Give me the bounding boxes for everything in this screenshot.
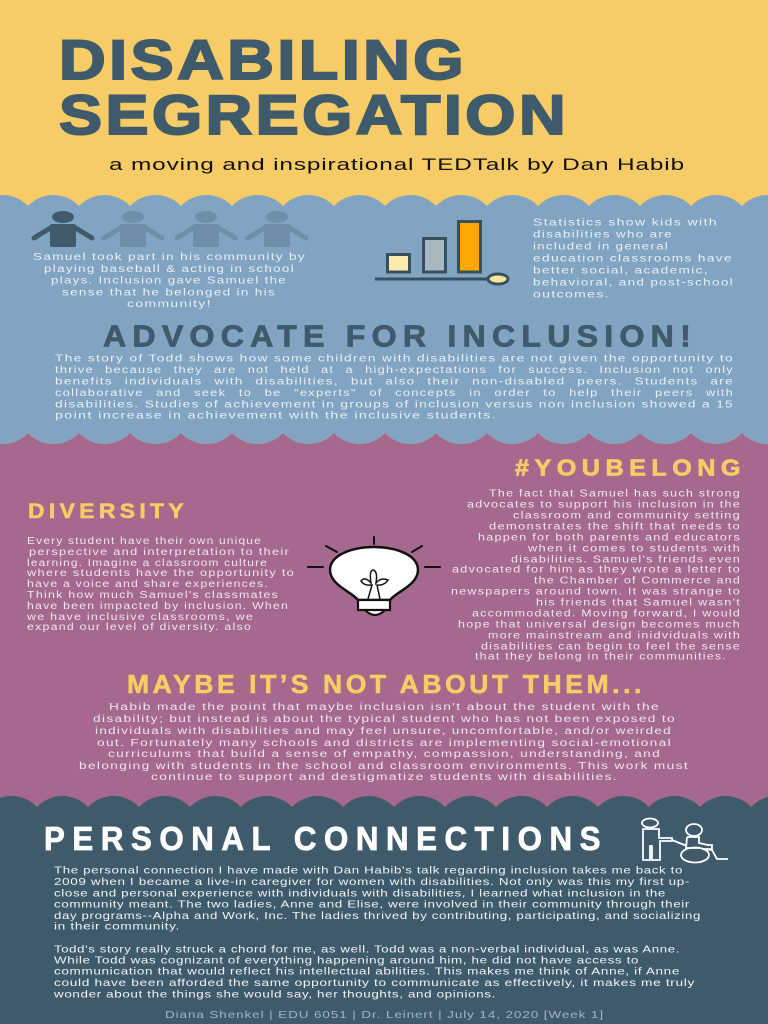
text block: Habib point: continue to support and destigmatize students with disabilities. — [151, 772, 618, 783]
text block: diversity: learning. Imagine a classroom culture — [27, 558, 268, 569]
title: SEGREGATION — [59, 83, 569, 146]
icon: caregiver with wheelchair user — [642, 818, 728, 862]
text block: Samuel community: plays. Inclusion gave Samuel the — [51, 276, 287, 286]
text block: personal connection paragraph 1 — [54, 864, 701, 932]
text block: youbelong: the Chamber of Commerce and — [534, 576, 741, 586]
panel: yellow title header — [0, 0, 768, 215]
text block: story of Todd: The story of Todd shows how some children with disabilities are not given the opportunity to — [55, 354, 734, 364]
text block: diversity: perspective and interpretation to their — [29, 547, 290, 558]
text block: diversity: where students have the opportunity to — [26, 568, 295, 579]
heading: youbelong: #YOUBELONG — [515, 454, 746, 480]
text block: personal connection paragraph 1: in their community. — [54, 920, 180, 932]
text block: youbelong: advocated for him as they wrote a letter to — [452, 564, 741, 576]
text block: personal connection paragraph 2: Todd's story really struck a chord for me, as well. Todd was a non-verbal individual, as was Anne. — [54, 944, 680, 956]
text block: youbelong: when it comes to students with — [527, 544, 741, 554]
text block: youbelong: classroom and community setting — [513, 510, 741, 522]
text block: youbelong: The fact that Samuel has such strong — [489, 488, 741, 500]
text block: youbelong: more mainstream and inidviduals with — [488, 630, 741, 642]
title: DISABILING — [59, 28, 467, 91]
text block: youbelong: disabilities. Samuel's friends even — [511, 554, 741, 566]
text block: youbelong: accommodated. Moving forward, I would — [472, 608, 741, 620]
text block: Habib point: out. Fortunately many schools and districts are implementing social-emotional — [97, 738, 672, 749]
text block: statistics: behavioral, and post-school — [533, 278, 734, 288]
text block: story of Todd: collaborative and seek to be "experts" of concepts in order to help their peers with — [55, 388, 734, 399]
text block: personal connection paragraph 1: close and personal experience with individuals with disabilities, I learned what inclusion in the — [54, 888, 666, 900]
text block: Habib point: individuals with disabilities and may feel unsure, uncomfortable, and/or weirded — [95, 726, 672, 737]
text block: youbelong: disabilities can begin to feel the sense — [481, 642, 741, 652]
text block: diversity: have been impacted by inclusion. When — [27, 601, 289, 612]
text block: statistics — [533, 218, 734, 300]
text block: story of Todd: disabilities. Studies of achievement in groups of inclusion versus non inclusion showed a 15 — [55, 400, 734, 410]
heading: diversity: DIVERSITY — [28, 500, 188, 523]
text block: statistics: outcomes. — [533, 290, 610, 300]
text block: story of Todd: benefits individuals with disabilities, but also their non-disabled peers. Students are — [55, 376, 734, 388]
text block: diversity: Every student have their own unique — [27, 536, 262, 547]
text block: Samuel community: community! — [127, 299, 212, 310]
panel: blue advocate for inclusion — [0, 195, 768, 444]
text block: Habib point: belonging with students in the school and classroom environments. This work must — [79, 761, 689, 772]
text block: story of Todd — [55, 354, 734, 422]
text block: Habib point: disability; but instead is about the typical student who has not been exposed to — [93, 714, 676, 725]
panel: dark personal connections background — [0, 796, 768, 1024]
text block: personal connection paragraph 1: The personal connection I have made with Dan Habib's talk regarding inclusion takes me back to — [54, 864, 683, 876]
footer: Diana Shenkel | EDU 6051 | Dr. Leinert | July 14, 2020 [Week 1] — [165, 1009, 604, 1021]
subtitle: a moving and inspirational TEDTalk by Dan Habib — [109, 155, 685, 174]
text block: diversity: we have inclusive classrooms, we — [26, 612, 254, 623]
text block: story of Todd: point increase in achievement with the inclusive students. — [55, 410, 497, 422]
text block: Habib point: Habib made the point that maybe inclusion isn't about the student with the — [109, 702, 660, 713]
text block: story of Todd: thrive because they are not held at a high-expectations for success. Inclusion not only — [55, 365, 734, 376]
icon: light bulb — [308, 537, 440, 615]
text block: youbelong: happen for both parents and educators — [478, 532, 741, 544]
text block: Habib point: curriculums that build a sense of empathy, compassion, understanding, and — [108, 749, 661, 760]
icon: bar chart — [375, 222, 508, 284]
text block: Samuel community: playing baseball & acting in school — [44, 264, 295, 275]
text block: diversity: Think how much Samuel's classmates — [27, 590, 279, 601]
text block: personal connection paragraph 2: communication that would reflect his intellectual abilities. This makes me think of Anne, if Anne — [54, 966, 680, 978]
text block: Samuel community: Samuel took part in his community by — [33, 252, 306, 263]
text block: youbelong — [451, 488, 741, 662]
text block: personal connection paragraph 2: While Todd was cognizant of everything happening around him, he did not have access to — [54, 954, 639, 966]
text block: personal connection paragraph 2 — [53, 944, 695, 1000]
text block: personal connection paragraph 1: day programs--Alpha and Work, Inc. The ladies thrived by contributing, participating, and socializing — [54, 910, 701, 922]
panel: mauve section background — [0, 433, 768, 815]
text block: Samuel community: sense that he belonged in his — [62, 288, 276, 298]
text block: youbelong: demonstrates the shift that needs to — [489, 522, 741, 532]
text block: Samuel community — [33, 252, 306, 310]
heading: advocate for inclusion: ADVOCATE FOR INCLUSION! — [103, 318, 697, 354]
text block: youbelong: that they belong in their communities. — [475, 652, 727, 662]
text block: youbelong: hope that universal design becomes much — [458, 620, 741, 630]
heading: maybe it's not about them: MAYBE IT’S NOT ABOUT THEM... — [127, 669, 645, 699]
text block: statistics: Statistics show kids with — [533, 218, 718, 228]
title — [59, 28, 569, 146]
text block: statistics: disabilities who are — [533, 230, 673, 240]
text block: Habib point — [79, 702, 689, 783]
text block: diversity: have a voice and share experiences. — [27, 579, 269, 590]
text block: diversity — [26, 536, 295, 633]
text block: personal connection paragraph 1: community meant. The two ladies, Anne and Elise, were involved in their community through their — [54, 898, 690, 910]
text block: youbelong: his friends that Samuel wasn't — [536, 598, 741, 608]
text block: statistics: included in general — [533, 242, 669, 252]
icon: row of four people — [34, 211, 306, 247]
text block: youbelong: newspapers around town. It was strange to — [451, 586, 741, 598]
text block: personal connection paragraph 2: could have been afforded the same opportunity to communicate as effectively, it makes me truly — [54, 977, 695, 989]
text block: diversity: expand our level of diversity. also — [27, 622, 252, 633]
text block: statistics: education classrooms have — [533, 254, 733, 264]
heading: personal connections: PERSONAL CONNECTIONS — [44, 820, 608, 857]
text block: youbelong: advocates to support his inclusion in the — [467, 500, 741, 510]
text block: personal connection paragraph 2: wonder about the things she would say, her thoughts, and opinions. — [53, 988, 496, 1000]
text block: personal connection paragraph 1: 2009 when I became a live-in caregiver for women with disabilities. Not only was this my first up- — [54, 876, 690, 888]
text block: statistics: better social, academic, — [533, 266, 709, 276]
